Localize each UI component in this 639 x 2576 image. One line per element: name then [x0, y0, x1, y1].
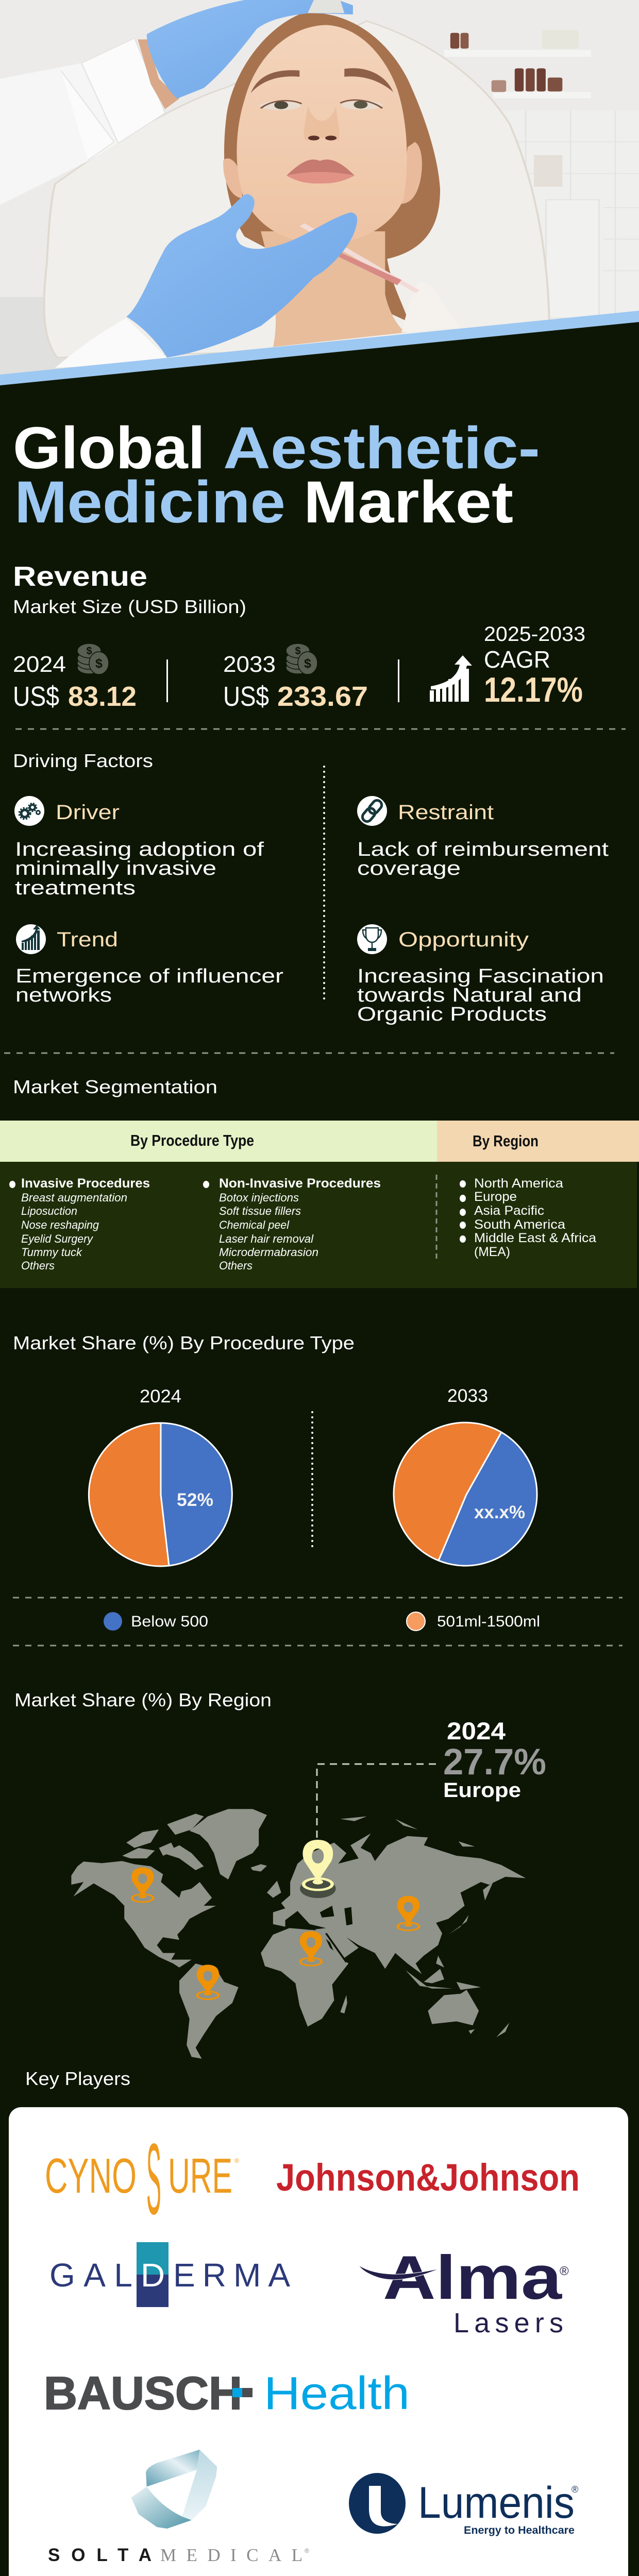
- list: non-invasive procedures: Others: [219, 1259, 253, 1272]
- icon: trend chart: [16, 924, 46, 954]
- header: by region: [437, 1121, 639, 1162]
- list: regions: [460, 1176, 596, 1259]
- logo: Cynosure: URE: [168, 2148, 232, 2204]
- pin: asia pacific: [397, 1896, 419, 1930]
- icon: trophy: [357, 924, 387, 954]
- stat: 2024 market size: 83.12: [68, 681, 137, 712]
- logo: Johnson and Johnson: Johnson&Johnson: [276, 2156, 580, 2199]
- stat: 2033 market size: US$: [223, 681, 269, 712]
- title: Aesthetic-: [223, 415, 540, 481]
- list: regions: (MEA): [474, 1245, 510, 1259]
- logo: Lumenis: Lumenis: [418, 2478, 575, 2528]
- legend: 501ml-1500ml: [437, 1613, 540, 1630]
- list: regions: North America: [474, 1176, 563, 1191]
- callout: europe share: 27.7%: [443, 1742, 546, 1783]
- title: [13, 415, 540, 535]
- panel: market share by procedure type: [13, 1332, 623, 1646]
- stat: CAGR: 2025-2033: [484, 623, 585, 646]
- icon: growth arrow: [430, 655, 472, 702]
- title: Global: [13, 415, 205, 481]
- panel: key players logos: [9, 2107, 628, 2576]
- logo: Cynosure: CYNO: [45, 2148, 137, 2204]
- pin: north america: [131, 1868, 154, 1902]
- legend: Below 500: [131, 1613, 208, 1630]
- logo: Alma Lasers: [359, 2243, 569, 2338]
- list: non-invasive procedures: Botox injections: [219, 1191, 299, 1204]
- callout leader line: [317, 1764, 436, 1840]
- logo: Solta Medical: [48, 2450, 309, 2565]
- logo: Galderma: ERMA: [173, 2257, 290, 2294]
- logo: Galderma: D: [141, 2257, 165, 2294]
- pie chart 2024: 52%: [177, 1490, 213, 1510]
- opportunity block: towards Natural and: [357, 985, 582, 1006]
- list: non-invasive procedures: Soft tissue fillers: [219, 1205, 301, 1217]
- driver block: Increasing adoption of: [15, 839, 264, 860]
- driving factors heading: Driving Factors: [13, 750, 153, 771]
- driver block: Driver: [56, 801, 120, 824]
- callout: europe share: [443, 1717, 546, 1802]
- logo: Solta Medical: ®: [305, 2547, 309, 2554]
- callout: europe share: 2024: [447, 1717, 506, 1744]
- stat: CAGR: CAGR: [484, 646, 550, 673]
- trend block: [15, 924, 283, 1006]
- stat: 2024 market size: [13, 643, 137, 712]
- restraint block: Restraint: [398, 801, 494, 824]
- panel: market share by procedure type: 2033: [447, 1386, 488, 1406]
- pin: south america: [197, 1965, 219, 1999]
- logo: Alma Lasers: Alma: [383, 2243, 562, 2312]
- legend: [104, 1612, 540, 1631]
- logo: Bausch Health: BAUSCH: [44, 2368, 242, 2419]
- restraint block: coverage: [357, 858, 461, 879]
- logo: Solta Medical: SOLTA: [48, 2545, 152, 2565]
- trend block: networks: [15, 985, 112, 1006]
- stat: CAGR: [484, 623, 585, 709]
- list: invasive procedures: Breast augmentation: [21, 1191, 127, 1204]
- logo: Cynosure: ®: [234, 2157, 239, 2164]
- driver block: treatments: [15, 877, 136, 899]
- heading: Market Share (%) By Procedure Type: [13, 1332, 355, 1353]
- restraint block: Lack of reimbursement: [357, 839, 609, 860]
- key players heading: Key Players: [25, 2068, 130, 2089]
- list: regions: Middle East & Africa: [474, 1231, 596, 1245]
- stat: 2024 market size: 2024: [13, 652, 66, 677]
- logo: Bausch Health: [44, 2368, 410, 2419]
- pie chart 2024: [89, 1423, 232, 1566]
- list: invasive procedures: Nose reshaping: [21, 1218, 99, 1231]
- list: non-invasive procedures: Laser hair removal: [219, 1232, 314, 1245]
- list: regions: Asia Pacific: [474, 1204, 544, 1218]
- logo: Bausch Health: Health: [264, 2368, 410, 2419]
- blue diagonal stripe: [0, 311, 639, 385]
- logo: Cynosure: S: [146, 2124, 161, 2236]
- panel: market share by procedure type: 2024: [140, 1386, 181, 1406]
- header: by procedure type: By Procedure Type: [130, 1131, 254, 1149]
- list: invasive procedures: [9, 1176, 150, 1272]
- panel: driving factors: [13, 750, 609, 1025]
- pie chart 2033: [394, 1422, 537, 1566]
- list: non-invasive procedures: [203, 1176, 381, 1272]
- list: invasive procedures: Eyelid Surgery: [21, 1232, 94, 1245]
- dark diagonal header edge: [0, 322, 639, 412]
- stat: 2033 market size: 2033: [223, 652, 276, 677]
- logo: Lumenis: Energy to Healthcare: [464, 2524, 575, 2536]
- header: by procedure type: [0, 1121, 437, 1162]
- trend block: Trend: [57, 928, 118, 951]
- pin: europe highlighted: [300, 1840, 336, 1898]
- header: by region: By Region: [473, 1132, 539, 1150]
- stat: 2033 market size: 233.67: [277, 681, 368, 712]
- title: Medicine: [14, 469, 285, 535]
- opportunity block: Organic Products: [357, 1004, 547, 1025]
- opportunity block: [357, 924, 604, 1025]
- list: non-invasive procedures: Non-Invasive Procedures: [219, 1176, 381, 1191]
- title: Market: [304, 469, 513, 535]
- list: invasive procedures: Tummy tuck: [21, 1246, 82, 1259]
- hero photo: aesthetic injection treatment: [0, 0, 639, 412]
- pin: middle east and africa: [300, 1931, 322, 1965]
- opportunity block: Opportunity: [398, 928, 529, 951]
- revenue heading: Revenue: [13, 561, 147, 592]
- logo: Alma Lasers: Lasers: [453, 2308, 563, 2338]
- panel: market segmentation table: [0, 1121, 639, 1288]
- market size subheading: Market Size (USD Billion): [13, 596, 246, 617]
- logo: Galderma: [49, 2242, 290, 2307]
- logo: Solta Medical: MEDICAL: [160, 2545, 302, 2565]
- logo: Lumenis: [349, 2473, 578, 2536]
- trend block: Emergence of influencer: [15, 965, 283, 987]
- list: invasive procedures: Liposuction: [21, 1205, 77, 1217]
- world map: [71, 1809, 526, 2059]
- driver block: minimally invasive: [15, 858, 216, 879]
- list: regions: South America: [474, 1217, 565, 1232]
- list: invasive procedures: Others: [21, 1259, 55, 1272]
- stat: 2033 market size: [223, 643, 368, 712]
- list: non-invasive procedures: Chemical peel: [219, 1218, 290, 1231]
- pie chart 2033: xx.x%: [474, 1502, 525, 1522]
- stat: 2024 market size: US$: [13, 681, 59, 712]
- logo: Lumenis: ®: [571, 2484, 578, 2495]
- list: regions: Europe: [474, 1190, 517, 1204]
- icon: gears: [14, 796, 44, 826]
- opportunity block: Increasing Fascination: [357, 965, 604, 987]
- callout: europe share: Europe: [443, 1779, 521, 1802]
- logo: Alma Lasers: ®: [560, 2264, 569, 2278]
- list: invasive procedures: Invasive Procedures: [21, 1176, 150, 1191]
- logo: Cynosure: [45, 2124, 239, 2236]
- panel: market share by region: [14, 1689, 546, 2059]
- stat: CAGR: 12.17%: [484, 670, 583, 709]
- list: non-invasive procedures: Microdermabrasion: [219, 1246, 318, 1259]
- heading: Market Share (%) By Region: [14, 1689, 272, 1710]
- market segmentation heading: Market Segmentation: [13, 1076, 217, 1097]
- panel: revenue: [13, 561, 585, 712]
- restraint block: [357, 796, 609, 879]
- logo: Galderma: GAL: [49, 2257, 132, 2294]
- icon: chain link: [357, 796, 387, 826]
- driver block: [14, 796, 264, 899]
